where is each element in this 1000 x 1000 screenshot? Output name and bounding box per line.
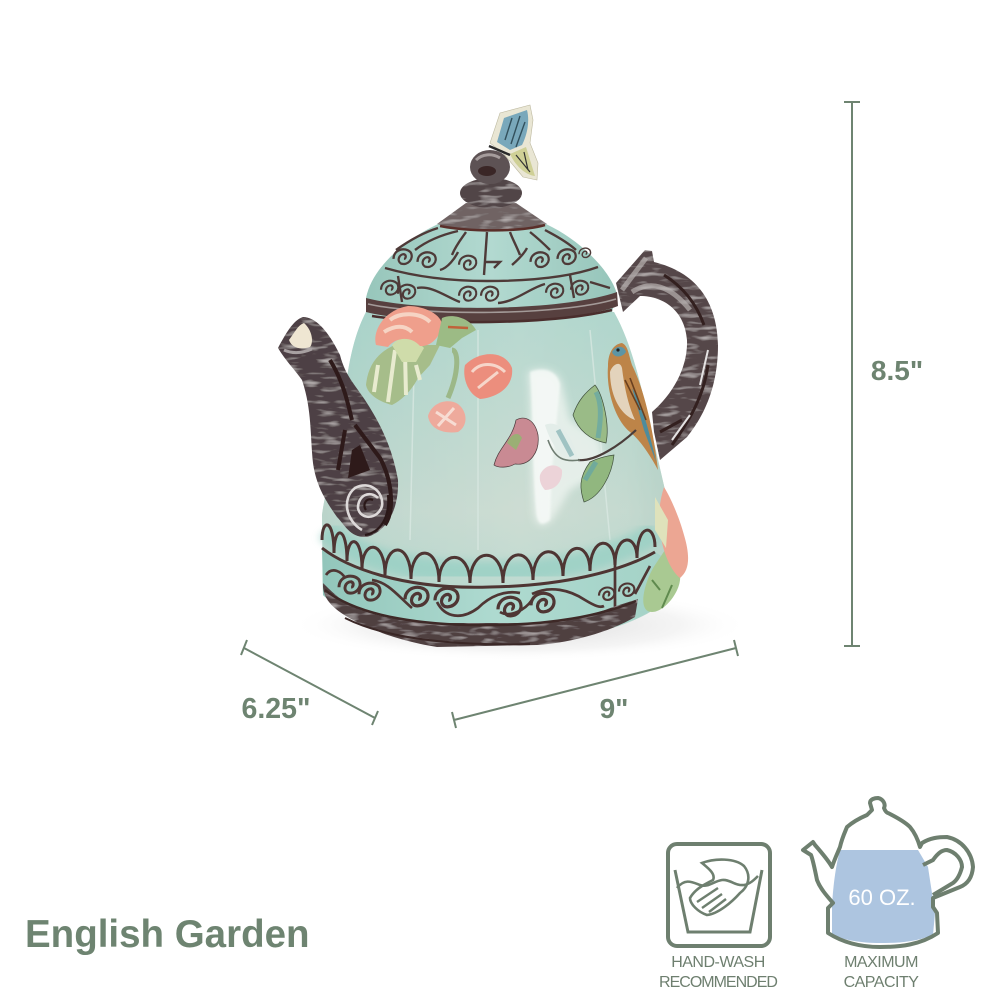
relief flowers, upper left	[366, 306, 512, 432]
label: 9 in: 9"	[600, 693, 628, 724]
dimension lines	[241, 102, 860, 728]
depth dimension line	[241, 640, 378, 725]
base band	[322, 525, 668, 645]
foot ring	[323, 583, 638, 647]
icon: teapot capacity	[803, 798, 973, 947]
glaze vertical ribs	[410, 330, 610, 550]
body	[322, 312, 680, 645]
lid cap and knob	[437, 150, 547, 230]
label: hand-wash recommended: RECOMMENDED	[659, 974, 777, 991]
icon: hand-wash	[668, 844, 770, 946]
lid ribs and scrolls	[381, 228, 610, 303]
teapot product photo	[278, 105, 718, 647]
title: English Garden	[25, 913, 310, 956]
label: maximum capacity: CAPACITY	[844, 974, 919, 991]
glaze highlight	[528, 369, 605, 525]
label: 6.25 in: 6.25"	[242, 693, 310, 725]
label: 60 oz: 60 OZ.	[848, 885, 916, 910]
scrolls	[326, 558, 650, 616]
painted branch, leaves and blossoms	[494, 385, 636, 502]
right relief flowers	[643, 487, 688, 612]
handle	[616, 250, 718, 460]
arches	[322, 525, 655, 587]
outline	[803, 798, 973, 947]
spout	[278, 317, 398, 537]
label: hand-wash recommended: HAND-WASH	[671, 954, 765, 971]
bird on branch	[608, 343, 658, 470]
label: maximum capacity: MAXIMUM	[844, 954, 918, 971]
floor shadow	[290, 589, 750, 661]
width dimension line	[452, 640, 738, 728]
icon: butterfly	[489, 105, 538, 180]
label: 8.5 in: 8.5"	[871, 355, 923, 386]
water fill	[832, 850, 935, 943]
height dimension line	[844, 102, 860, 646]
lid rim	[366, 292, 618, 322]
lid	[366, 224, 618, 322]
